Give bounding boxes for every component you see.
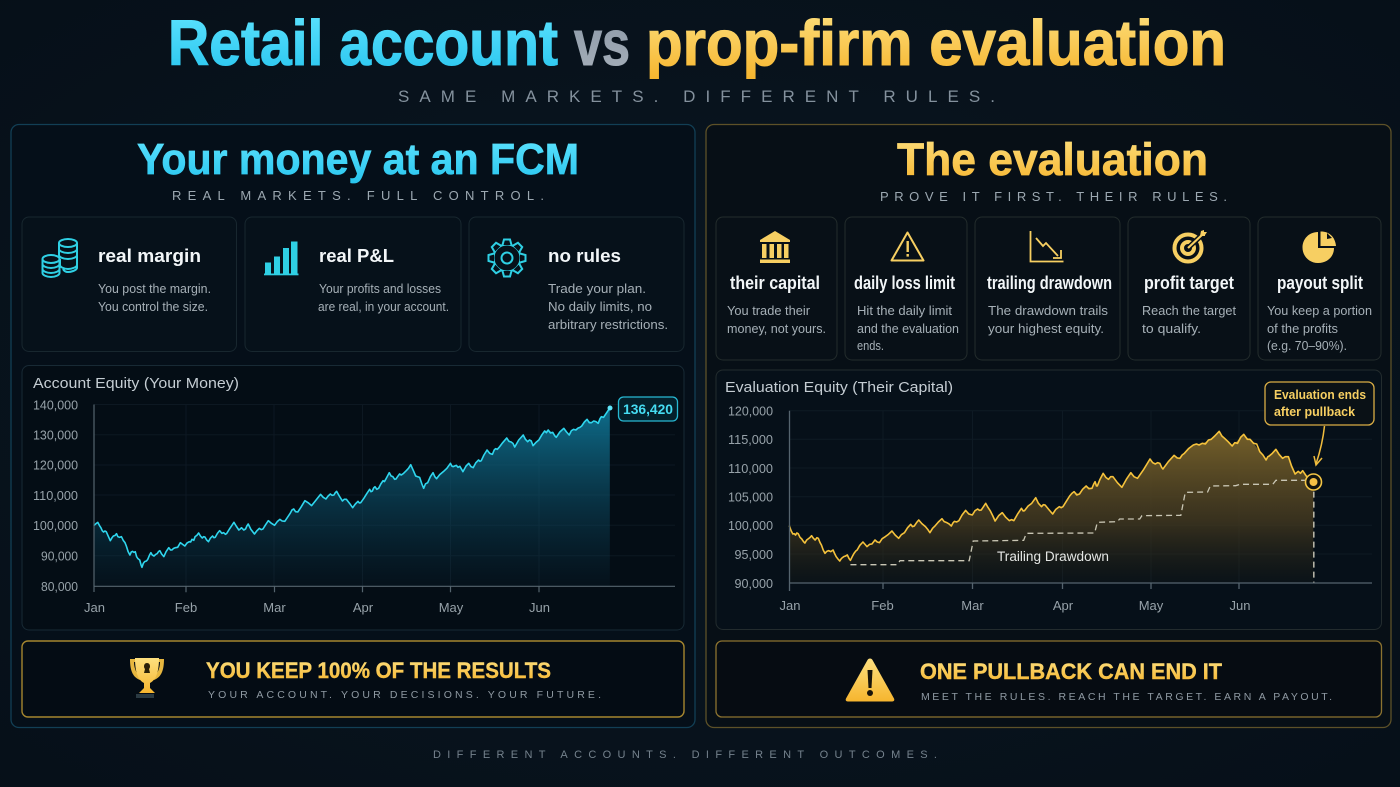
arrow to end point — [1314, 426, 1324, 465]
x axis labels: Apr — [1053, 598, 1074, 613]
x axis labels: Feb — [175, 600, 197, 615]
value label 136,420: 136,420 — [623, 401, 673, 417]
description: real P&L: Your profits and losses — [319, 281, 441, 296]
callout heading: YOU KEEP 100% OF THE RESULTS — [206, 658, 551, 683]
description: real margin: You control the size. — [98, 299, 208, 314]
description: profit target: Reach the target — [1142, 303, 1236, 318]
description: their capital — [727, 303, 826, 336]
y axis labels: 95,000 — [734, 547, 773, 562]
footer tagline: DIFFERENT ACCOUNTS. DIFFERENT OUTCOMES. — [433, 749, 937, 761]
icon: bank — [760, 231, 790, 263]
icon: gear — [488, 240, 526, 276]
x axis labels: Feb — [871, 598, 894, 613]
panel subheading: retail: REAL MARKETS. FULL CONTROL. — [172, 188, 544, 203]
card: their capital — [716, 217, 837, 360]
heading: no rules: no rules — [548, 246, 621, 266]
x axis labels — [84, 600, 550, 615]
card: no rules — [469, 217, 684, 352]
gridlines — [94, 404, 675, 586]
subtitle: SAME MARKETS. DIFFERENT RULES. — [398, 87, 995, 106]
heading: trailing drawdown: trailing drawdown — [987, 273, 1112, 293]
description: no rules: arbitrary restrictions. — [548, 317, 668, 332]
card: real margin — [22, 217, 236, 352]
callout bar: one pullback — [716, 641, 1382, 717]
description: no rules: Trade your plan. — [548, 281, 646, 296]
y axis labels: 90,000 — [41, 548, 78, 564]
y axis labels: 100,000 — [33, 518, 78, 533]
card: real P&L — [245, 217, 461, 352]
y axis labels: 115,000 — [728, 432, 773, 447]
x axis labels: Jun — [1230, 598, 1250, 613]
heading: profit target: profit target — [1144, 273, 1234, 293]
heading: real margin: real margin — [98, 246, 201, 266]
callout: evaluation ends: after pullback — [1274, 405, 1355, 419]
title: Retail account — [168, 7, 558, 79]
title — [168, 7, 1226, 79]
x axis labels: Jun — [529, 600, 550, 615]
y axis labels: 100,000 — [728, 518, 773, 533]
heading: payout split: payout split — [1277, 273, 1363, 293]
description: payout split — [1267, 303, 1372, 353]
heading: their capital: their capital — [730, 273, 820, 293]
equity line chart — [94, 408, 610, 586]
description: trailing drawdown: The drawdown trails — [988, 303, 1109, 318]
description: payout split: You keep a portion — [1267, 303, 1372, 318]
description: real P&L: are real, in your account. — [318, 299, 449, 314]
description: profit target — [1142, 303, 1236, 336]
card: daily loss limit — [845, 217, 967, 360]
axes — [790, 411, 1372, 591]
heading: daily loss limit: daily loss limit — [854, 273, 955, 293]
description: real margin: You post the margin. — [98, 281, 211, 296]
icon: pie chart — [1302, 232, 1336, 263]
description: no rules: No daily limits, no — [548, 299, 652, 314]
panel heading: your money: Your money at an FCM — [137, 135, 579, 184]
chart title: Account Equity (Your Money) — [33, 375, 239, 392]
description: real margin — [98, 281, 211, 314]
description: profit target: to qualify. — [1142, 321, 1201, 336]
equity line chart — [789, 431, 1314, 583]
heading: real P&L: real P&L — [319, 246, 394, 266]
value label 136,420 — [618, 397, 678, 421]
description: payout split: (e.g. 70–90%). — [1267, 338, 1347, 353]
panel: prop-firm evaluation — [706, 124, 1391, 728]
y axis labels: 110,000 — [33, 488, 78, 503]
callout subtext: MEET THE RULES. REACH THE TARGET. EARN A PAYOUT. — [921, 691, 1332, 703]
x axis labels: Jan — [84, 600, 105, 615]
chart title: Evaluation Equity (Their Capital) — [725, 379, 953, 396]
y axis labels: 120,000 — [728, 404, 773, 418]
description: daily loss limit: and the evaluation — [857, 321, 959, 336]
title: vs — [574, 7, 630, 79]
callout bar: keep results — [22, 641, 684, 717]
description: real P&L — [318, 281, 449, 314]
y axis labels: 130,000 — [33, 428, 78, 442]
y axis labels — [728, 404, 773, 591]
description: daily loss limit: Hit the daily limit — [857, 303, 952, 318]
callout subtext: YOUR ACCOUNT. YOUR DECISIONS. YOUR FUTURE. — [208, 689, 601, 701]
y axis labels: 105,000 — [728, 490, 773, 504]
y axis labels: 80,000 — [41, 579, 78, 594]
y axis labels — [33, 398, 78, 594]
callout: evaluation ends — [1265, 382, 1374, 425]
panel heading: the evaluation: The evaluation — [897, 134, 1208, 185]
icon: falling chart — [1030, 231, 1064, 262]
x axis labels: Jan — [780, 598, 800, 613]
x axis labels: Mar — [961, 598, 984, 613]
y axis labels: 110,000 — [728, 461, 773, 476]
card: profit target — [1128, 217, 1250, 360]
card: trailing drawdown — [975, 217, 1120, 360]
x axis labels: Apr — [353, 600, 374, 615]
callout: evaluation ends: Evaluation ends — [1274, 388, 1366, 402]
x axis labels: May — [439, 600, 464, 615]
y axis labels: 140,000 — [33, 398, 78, 412]
title: prop-firm evaluation — [646, 7, 1226, 79]
chart panel: evaluation equity — [716, 370, 1382, 630]
x axis labels: Mar — [263, 600, 286, 615]
icon: trophy — [130, 658, 164, 698]
panel: retail account — [11, 124, 695, 728]
x axis labels: May — [1139, 598, 1164, 613]
description: daily loss limit: ends. — [857, 338, 884, 353]
y axis labels: 90,000 — [734, 576, 773, 591]
axes — [94, 404, 675, 592]
icon: warning outline — [892, 232, 924, 260]
description: trailing drawdown: your highest equity. — [988, 321, 1104, 336]
x axis labels — [780, 598, 1250, 613]
card: payout split — [1258, 217, 1381, 360]
panel subheading: evaluation: PROVE IT FIRST. THEIR RULES. — [880, 189, 1227, 204]
gridlines — [789, 411, 1372, 583]
icon: target — [1174, 230, 1207, 262]
icon: warning triangle — [846, 658, 894, 702]
icon: coins — [42, 239, 77, 277]
callout heading: ONE PULLBACK CAN END IT — [920, 659, 1223, 684]
description: their capital: You trade their — [727, 303, 811, 318]
description: their capital: money, not yours. — [727, 321, 826, 336]
description: no rules — [548, 281, 668, 332]
description: trailing drawdown — [988, 303, 1109, 336]
label: trailing drawdown: Trailing Drawdown — [997, 549, 1109, 564]
y axis labels: 120,000 — [33, 458, 78, 472]
end point marker — [608, 406, 612, 410]
end point marker — [1306, 474, 1322, 490]
description: daily loss limit — [857, 303, 959, 353]
icon: bars — [264, 242, 298, 275]
description: payout split: of the profits — [1267, 321, 1338, 336]
chart panel: account equity — [22, 366, 684, 630]
